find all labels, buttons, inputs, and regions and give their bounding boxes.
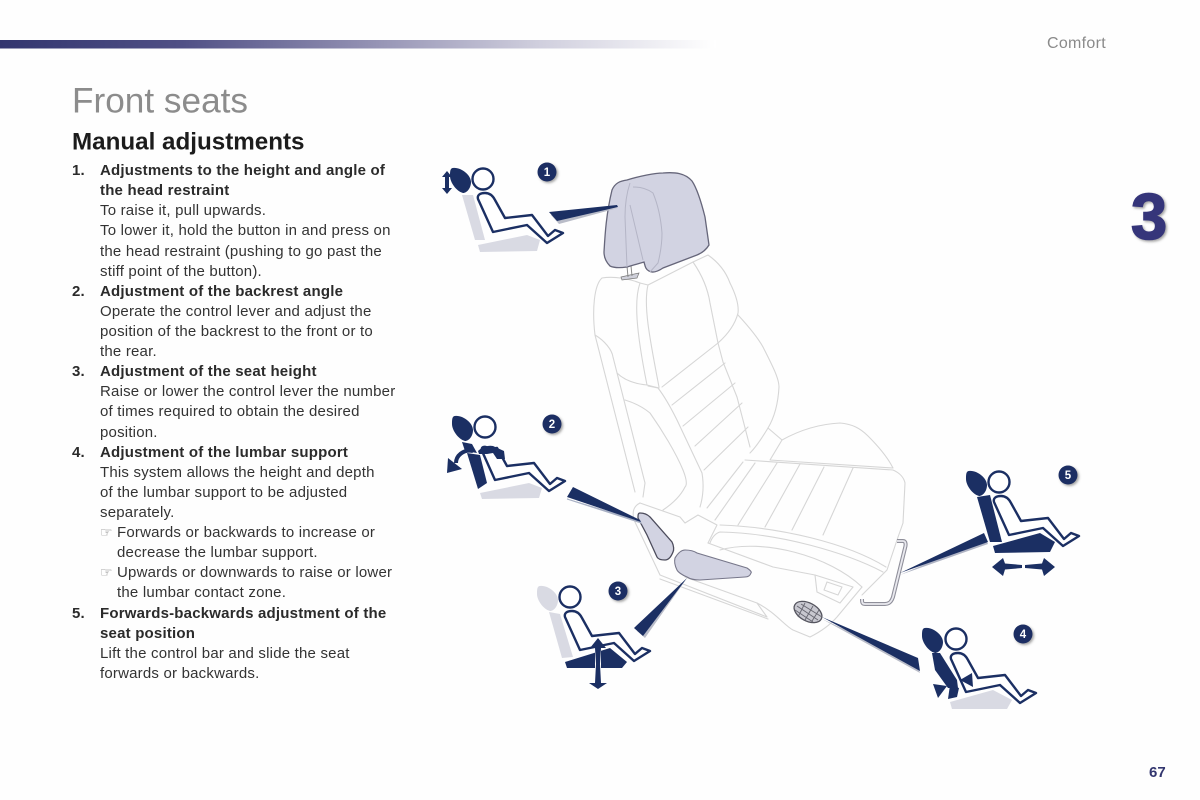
subheading: Manual adjustments xyxy=(72,128,305,156)
instructions text block: 5. xyxy=(72,605,85,622)
instructions text block: of the lumbar support to be adjusted xyxy=(100,484,347,501)
badge 5: 5 xyxy=(1065,470,1072,482)
section label: Comfort: Comfort xyxy=(1047,35,1106,52)
instructions text block: Adjustment of the seat height xyxy=(100,363,317,380)
instructions text block: the lumbar contact zone. xyxy=(117,584,286,601)
control bar xyxy=(862,541,906,604)
badge 2 xyxy=(542,414,562,434)
instructions text block: To raise it, pull upwards. xyxy=(100,202,266,219)
instructions text block: stiff point of the button). xyxy=(100,263,262,280)
badge 1 xyxy=(538,162,556,182)
instructions text block: of times required to obtain the desired xyxy=(100,403,360,420)
figure 3: seat height adjustment xyxy=(537,586,650,689)
badge 2: 2 xyxy=(549,419,555,431)
chapter number 3: 3 xyxy=(1131,180,1167,253)
leader 1 xyxy=(549,205,618,224)
figure 5: seat position adjustment xyxy=(966,471,1079,576)
page number: 67 xyxy=(1149,764,1166,781)
badge 5 xyxy=(1058,466,1078,484)
instructions text block: Adjustments to the height and angle of xyxy=(100,162,386,179)
leader 3 xyxy=(634,578,687,638)
instructions text block: 4. xyxy=(72,444,85,461)
backrest angle lever highlighted xyxy=(638,513,674,560)
instructions text block: 3. xyxy=(72,363,85,380)
title: Front seats xyxy=(72,82,248,120)
instructions text block: Upwards or downwards to raise or lower xyxy=(117,564,392,581)
instructions text block: Operate the control lever and adjust the xyxy=(100,303,372,320)
instructions text block: ☞ xyxy=(100,565,113,581)
instructions text block: seat position xyxy=(100,625,195,642)
figure 4: lumbar support adjustment xyxy=(922,628,1036,709)
instructions text block: the rear. xyxy=(100,343,157,360)
instructions text block: ☞ xyxy=(100,525,113,541)
figure 2: backrest angle adjustment xyxy=(447,416,565,499)
figure 1: head restraint adjustment xyxy=(442,168,563,252)
instructions text block: Forwards-backwards adjustment of the xyxy=(100,605,386,622)
instructions text block: the head restraint (pushing to go past the xyxy=(100,243,382,260)
instructions text block: position of the backrest to the front or to xyxy=(100,323,373,340)
instructions text block: Adjustment of the backrest angle xyxy=(100,283,343,300)
badge 3 xyxy=(608,582,628,600)
instructions text block: the head restraint xyxy=(100,182,229,199)
instructions text block: separately. xyxy=(100,504,174,521)
badge 4 xyxy=(1014,624,1032,644)
leader 2 xyxy=(567,487,641,523)
badge 1: 1 xyxy=(544,167,551,179)
instructions text block: 1. xyxy=(72,162,85,179)
instructions text block: Forwards or backwards to increase or xyxy=(117,524,375,541)
instructions text block xyxy=(72,162,395,682)
badge 4: 4 xyxy=(1020,629,1027,641)
instructions text block: Lift the control bar and slide the seat xyxy=(100,645,350,662)
instructions text block: 2. xyxy=(72,283,85,300)
instructions text block: Adjustment of the lumbar support xyxy=(100,444,348,461)
head restraint highlighted xyxy=(604,173,709,280)
badge 3: 3 xyxy=(615,586,621,598)
leader 4 xyxy=(822,617,920,673)
instructions text block: forwards or backwards. xyxy=(100,665,259,682)
lumbar control highlighted xyxy=(791,597,825,627)
instructions text block: decrease the lumbar support. xyxy=(117,544,318,561)
leader 5 xyxy=(900,533,988,575)
instructions text block: To lower it, hold the button in and press on xyxy=(100,222,391,239)
instructions text block: Raise or lower the control lever the number xyxy=(100,383,395,400)
instructions text block: position. xyxy=(100,424,158,441)
instructions text block: This system allows the height and depth xyxy=(100,464,375,481)
seat height lever highlighted xyxy=(675,550,751,580)
header gradient bar xyxy=(0,40,716,48)
seat line drawing xyxy=(594,255,905,637)
